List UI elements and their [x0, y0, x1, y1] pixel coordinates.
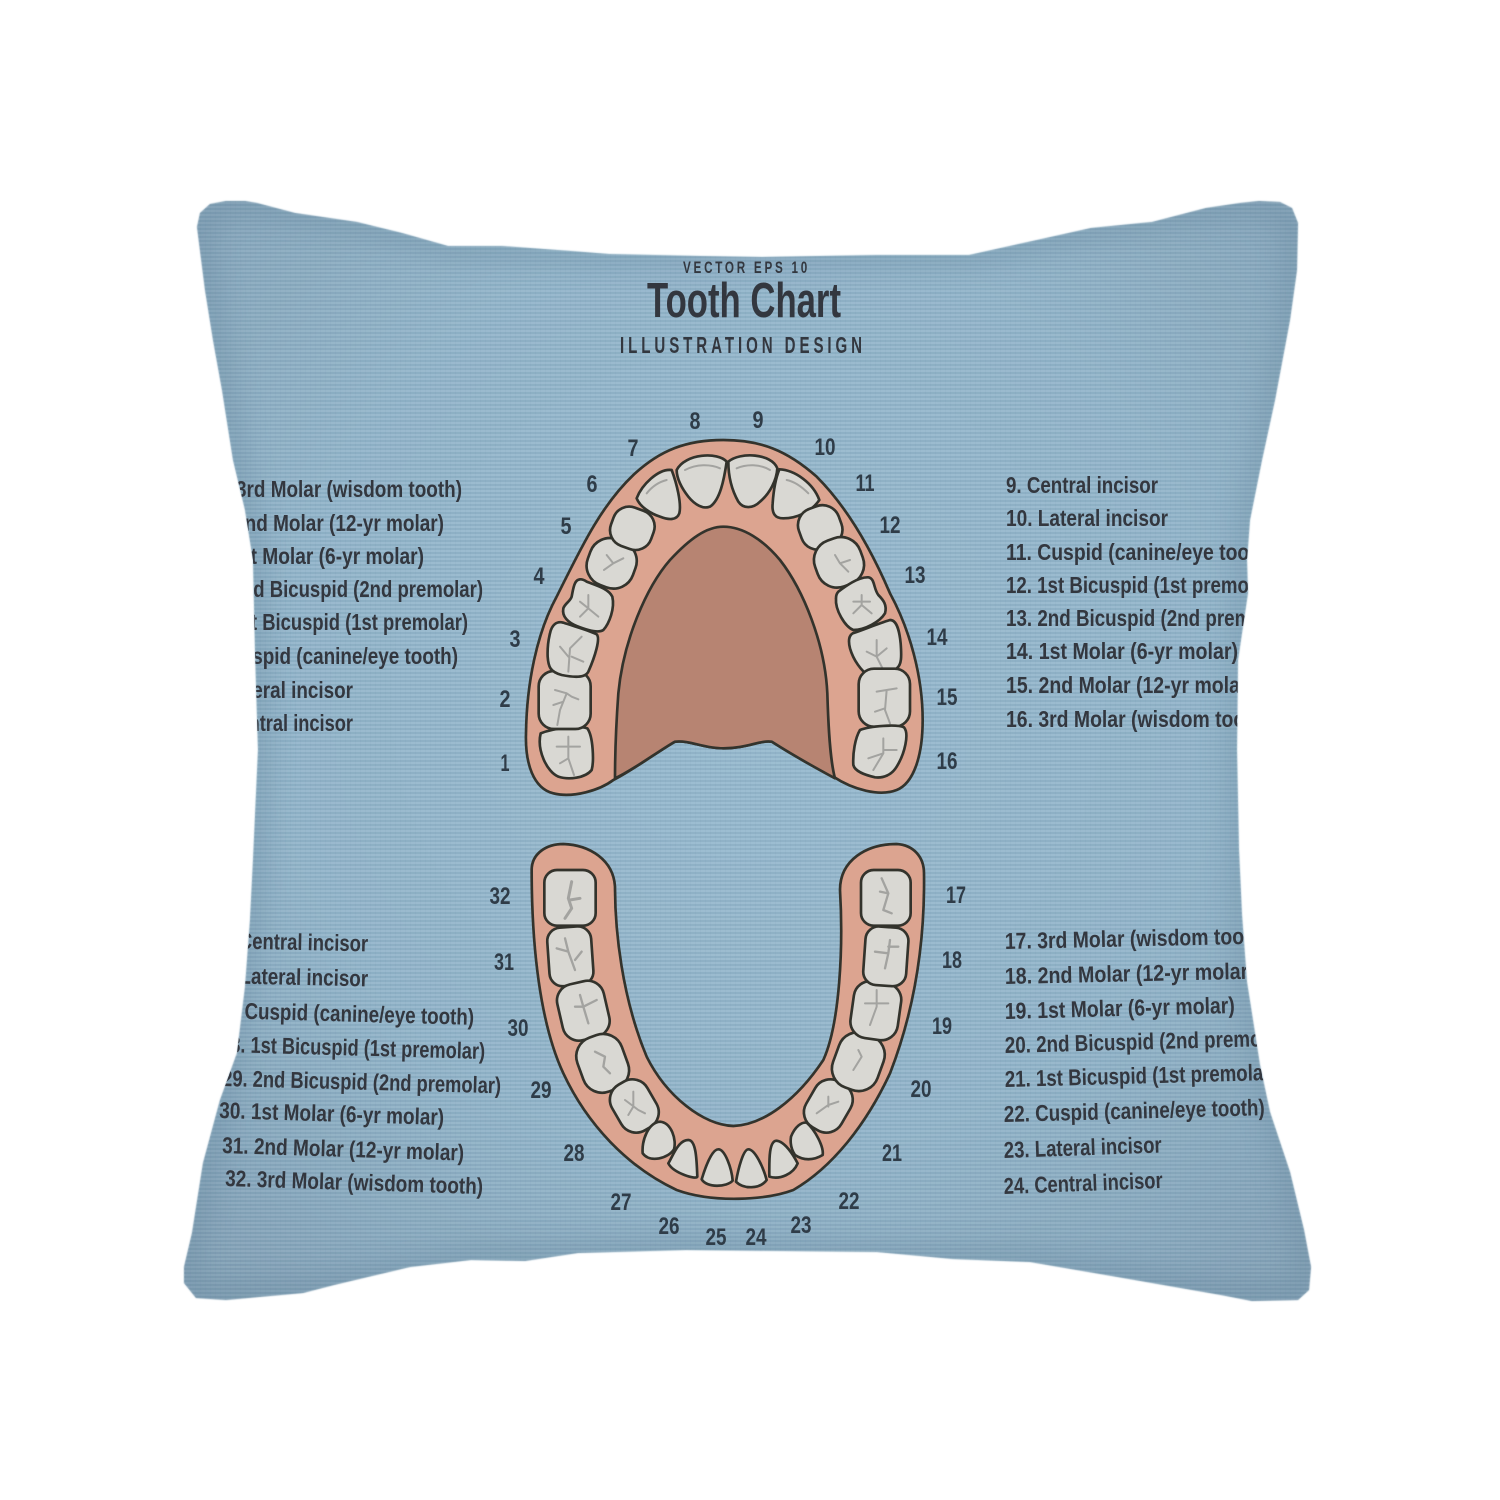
tooth 14: [849, 620, 901, 675]
tooth 17: [861, 870, 911, 926]
tooth number labels: 31: [494, 949, 514, 976]
tooth 27: [643, 1122, 675, 1159]
tooth 25: [702, 1149, 733, 1186]
legend: lower left teeth 25-32: 30. 1st Molar (6-yr molar): [219, 1097, 445, 1130]
legend: lower right teeth 17-24: 24. Central incisor: [1003, 1167, 1163, 1199]
tooth number labels: 22: [838, 1188, 860, 1215]
tooth number labels: 23: [790, 1212, 812, 1239]
lower arch diagram: [532, 844, 924, 1199]
tooth number labels: 15: [936, 684, 958, 711]
tooth number labels: 3: [510, 626, 520, 653]
upper arch diagram: [526, 440, 923, 795]
tooth 2: [539, 671, 591, 729]
tooth number labels: 2: [500, 686, 510, 713]
tooth 21: [798, 1073, 859, 1139]
legend: lower left teeth 25-32: 28. 1st Bicuspid (1st premolar): [220, 1031, 485, 1064]
legend: lower right teeth 17-24: 17. 3rd Molar (wisdom tooth): [1005, 922, 1269, 954]
tooth number labels: 5: [560, 513, 572, 540]
tooth 29: [571, 1028, 635, 1098]
panel: blue linen pillow: [170, 190, 1330, 1310]
tooth 22: [791, 1123, 823, 1159]
legend: lower left teeth 25-32: 25. Central incisor: [208, 927, 368, 956]
tooth number labels: 18: [942, 947, 962, 974]
tooth 20: [826, 1027, 890, 1097]
tooth 4: [563, 579, 613, 631]
tooth 5: [581, 532, 643, 594]
legend: upper right teeth 9-16: [1006, 476, 1248, 732]
tooth 31: [546, 926, 594, 987]
tooth number labels: 13: [904, 562, 926, 589]
legend: upper right teeth 9-16: 13. 2nd Bicuspid (2nd premolar): [1006, 605, 1292, 631]
tooth 11: [793, 500, 847, 555]
legend: lower left teeth 25-32: 32. 3rd Molar (wisdom tooth): [225, 1165, 484, 1199]
palate: [615, 527, 835, 778]
tooth number labels: 16: [936, 748, 958, 775]
tooth 1: [540, 727, 593, 778]
legend: upper left teeth 1-8: 6. Cuspid (canine/eye tooth): [206, 643, 458, 669]
legend: lower left teeth 25-32: 27. Cuspid (canine/eye tooth): [213, 997, 474, 1030]
legend: upper right teeth 9-16: 15. 2nd Molar (12-yr molar): [1006, 672, 1254, 698]
tooth number labels: 1: [500, 750, 510, 777]
tooth number labels: 25: [706, 1224, 726, 1251]
legend: lower left teeth 25-32: 29. 2nd Bicuspid (2nd premolar): [222, 1065, 501, 1098]
tooth number labels: 28: [564, 1140, 584, 1167]
lower gum: [532, 844, 924, 1199]
tooth 28: [604, 1073, 665, 1139]
tooth 24: [736, 1149, 767, 1187]
legend: upper left teeth 1-8: 1. 3rd Molar (wisdom tooth): [215, 476, 462, 502]
tooth number labels: 30: [508, 1015, 528, 1042]
tooth 23: [769, 1141, 798, 1178]
tooth number labels: 4: [534, 563, 545, 590]
tooth 8: [677, 455, 727, 507]
legend: upper left teeth 1-8: 2. 2nd Molar (12-yr molar): [213, 510, 444, 536]
tooth 12: [808, 531, 870, 593]
legend: upper left teeth 1-8: 8. Central incisor: [205, 710, 353, 736]
tooth number labels: 21: [882, 1140, 902, 1167]
heading block: [620, 258, 866, 358]
tooth 19: [848, 979, 903, 1042]
legend: upper left teeth 1-8: 4. 2nd Bicuspid (2nd premolar): [211, 576, 483, 602]
tooth number labels: [490, 407, 966, 1251]
tooth 7: [637, 470, 680, 519]
tooth number labels: 20: [910, 1076, 932, 1103]
legend: lower left teeth 25-32: 31. 2nd Molar (12-yr molar): [222, 1132, 465, 1166]
pillow infographic: [183, 200, 1312, 1302]
legend: upper left teeth 1-8: [238, 480, 482, 731]
tooth number labels: 29: [530, 1077, 552, 1104]
tooth 18: [862, 926, 909, 987]
legend: lower right teeth 17-24: 19. 1st Molar (6-yr molar): [1004, 992, 1235, 1024]
tooth number labels: 19: [932, 1013, 952, 1040]
tooth 15: [859, 669, 910, 727]
tooth 6: [605, 502, 659, 555]
tooth 3: [548, 622, 598, 677]
tooth number labels: 6: [586, 471, 598, 498]
legend: lower right teeth 17-24: 18. 2nd Molar (12-yr molar): [1005, 958, 1255, 989]
tooth 16: [853, 726, 906, 778]
tooth number labels: 14: [926, 624, 948, 651]
tooth number labels: 11: [856, 470, 874, 497]
tooth number labels: 9: [752, 407, 764, 434]
tooth number labels: 10: [814, 434, 836, 461]
legend: lower left teeth 25-32: 26. Lateral incisor: [208, 962, 368, 991]
legend: upper right teeth 9-16: 14. 1st Molar (6-yr molar): [1006, 638, 1238, 664]
legend: upper left teeth 1-8: 5. 1st Bicuspid (1st premolar): [210, 609, 468, 635]
tooth number labels: 26: [658, 1213, 680, 1240]
subtitle: ILLUSTRATION DESIGN: [620, 332, 866, 358]
legend: lower right teeth 17-24: 23. Lateral incisor: [1003, 1131, 1162, 1163]
legend: upper right teeth 9-16: 16. 3rd Molar (wisdom tooth): [1006, 706, 1270, 732]
tooth 9: [728, 455, 777, 507]
tooth number labels: 8: [690, 408, 700, 435]
legend: lower right teeth 17-24: 20. 2nd Bicuspid (2nd premolar): [1004, 1025, 1291, 1058]
tooth number labels: 12: [880, 512, 900, 539]
legend: lower right teeth 17-24: 21. 1st Bicuspid (1st premolar): [1004, 1059, 1277, 1092]
tooth 30: [554, 977, 613, 1044]
tooth 13: [836, 577, 886, 630]
legend: lower right teeth 17-24: [1004, 928, 1264, 1194]
legend: lower left teeth 25-32: [208, 927, 501, 1199]
legend: upper right teeth 9-16: 12. 1st Bicuspid (1st premolar): [1006, 572, 1278, 598]
tooth number labels: 27: [610, 1189, 632, 1216]
tooth number labels: 24: [746, 1224, 767, 1251]
tooth number labels: 17: [946, 882, 966, 909]
tooth 10: [772, 469, 819, 518]
tooth number labels: 7: [628, 435, 638, 462]
legend: upper right teeth 9-16: 9. Central incisor: [1006, 472, 1158, 498]
legend: lower right teeth 17-24: 22. Cuspid (canine/eye tooth): [1003, 1094, 1265, 1127]
eyebrow text: VECTOR EPS 10: [683, 258, 810, 277]
legend: upper left teeth 1-8: 7. Lateral incisor: [203, 677, 353, 703]
tooth 26: [668, 1140, 697, 1178]
legend: upper right teeth 9-16: 10. Lateral incisor: [1006, 505, 1168, 531]
tooth number labels: 32: [490, 883, 510, 910]
legend: upper right teeth 9-16: 11. Cuspid (canine/eye tooth): [1006, 539, 1274, 565]
upper gum: [526, 440, 923, 795]
tooth 32: [544, 870, 596, 926]
title: Tooth Chart: [647, 274, 841, 328]
legend: upper left teeth 1-8: 3. 1st Molar (6-yr molar): [208, 543, 424, 569]
